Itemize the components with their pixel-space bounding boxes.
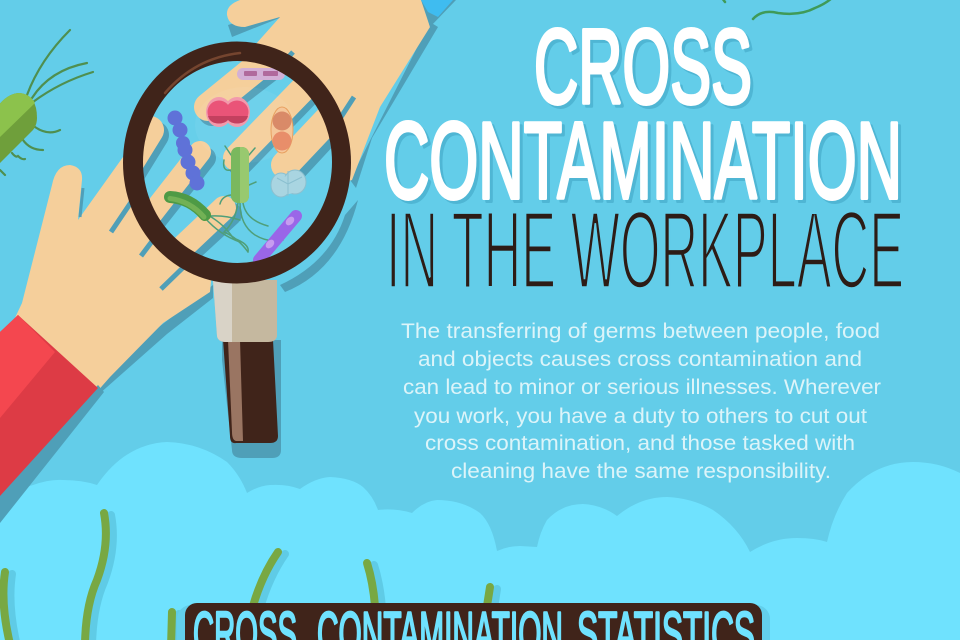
finger gaps outside the lens (80, 52, 354, 289)
flagella (205, 146, 283, 252)
bacterium: pale blue cell (271, 170, 306, 197)
finger shadows (143, 80, 331, 256)
intro text: and objects causes cross contamination and (418, 348, 862, 371)
intro text: cleaning have the same responsibility. (451, 460, 831, 483)
intro text: you work, you have a duty to others to cut out (414, 405, 867, 428)
sleeve: red cuff (0, 315, 104, 523)
cuff: blue (421, 0, 456, 27)
bacterium: blue chain (168, 110, 204, 190)
bacterium: green rod left (0, 30, 93, 175)
title: cross: CROSS (537, 11, 755, 129)
intro text: cross contamination, and those tasked with (425, 432, 855, 455)
ring highlight (165, 53, 240, 93)
hand: left (14, 157, 215, 394)
lens glare (195, 87, 295, 163)
bacteria strand top right (722, 0, 832, 19)
bacterium: orange diplococcus (271, 107, 293, 153)
hand shadows (98, 10, 438, 395)
clouds (0, 442, 960, 640)
intro text (401, 320, 881, 483)
intro text: can lead to minor or serious illnesses. Wherever (403, 376, 881, 399)
bacterium: green curved rod (170, 197, 205, 217)
grip highlight (228, 340, 243, 441)
handle grip (223, 340, 278, 443)
handle collar (213, 280, 277, 342)
bacterium: pink rod (237, 68, 285, 80)
green strands (3, 513, 497, 640)
bacterium: green rod (231, 147, 249, 203)
intro text: The transferring of germs between people, food (401, 320, 880, 343)
lens ring (123, 41, 351, 284)
hand: right (227, 0, 430, 182)
lens contents (143, 61, 332, 262)
fingers (143, 61, 330, 252)
handle shadow (222, 340, 281, 458)
bacterium: red diplococcus (206, 97, 250, 127)
title: cross (534, 8, 755, 129)
bacterium: purple chain (259, 215, 296, 260)
lens shadow (280, 200, 358, 292)
title: cross: CROSS (534, 8, 752, 126)
magnifying glass (110, 41, 358, 458)
